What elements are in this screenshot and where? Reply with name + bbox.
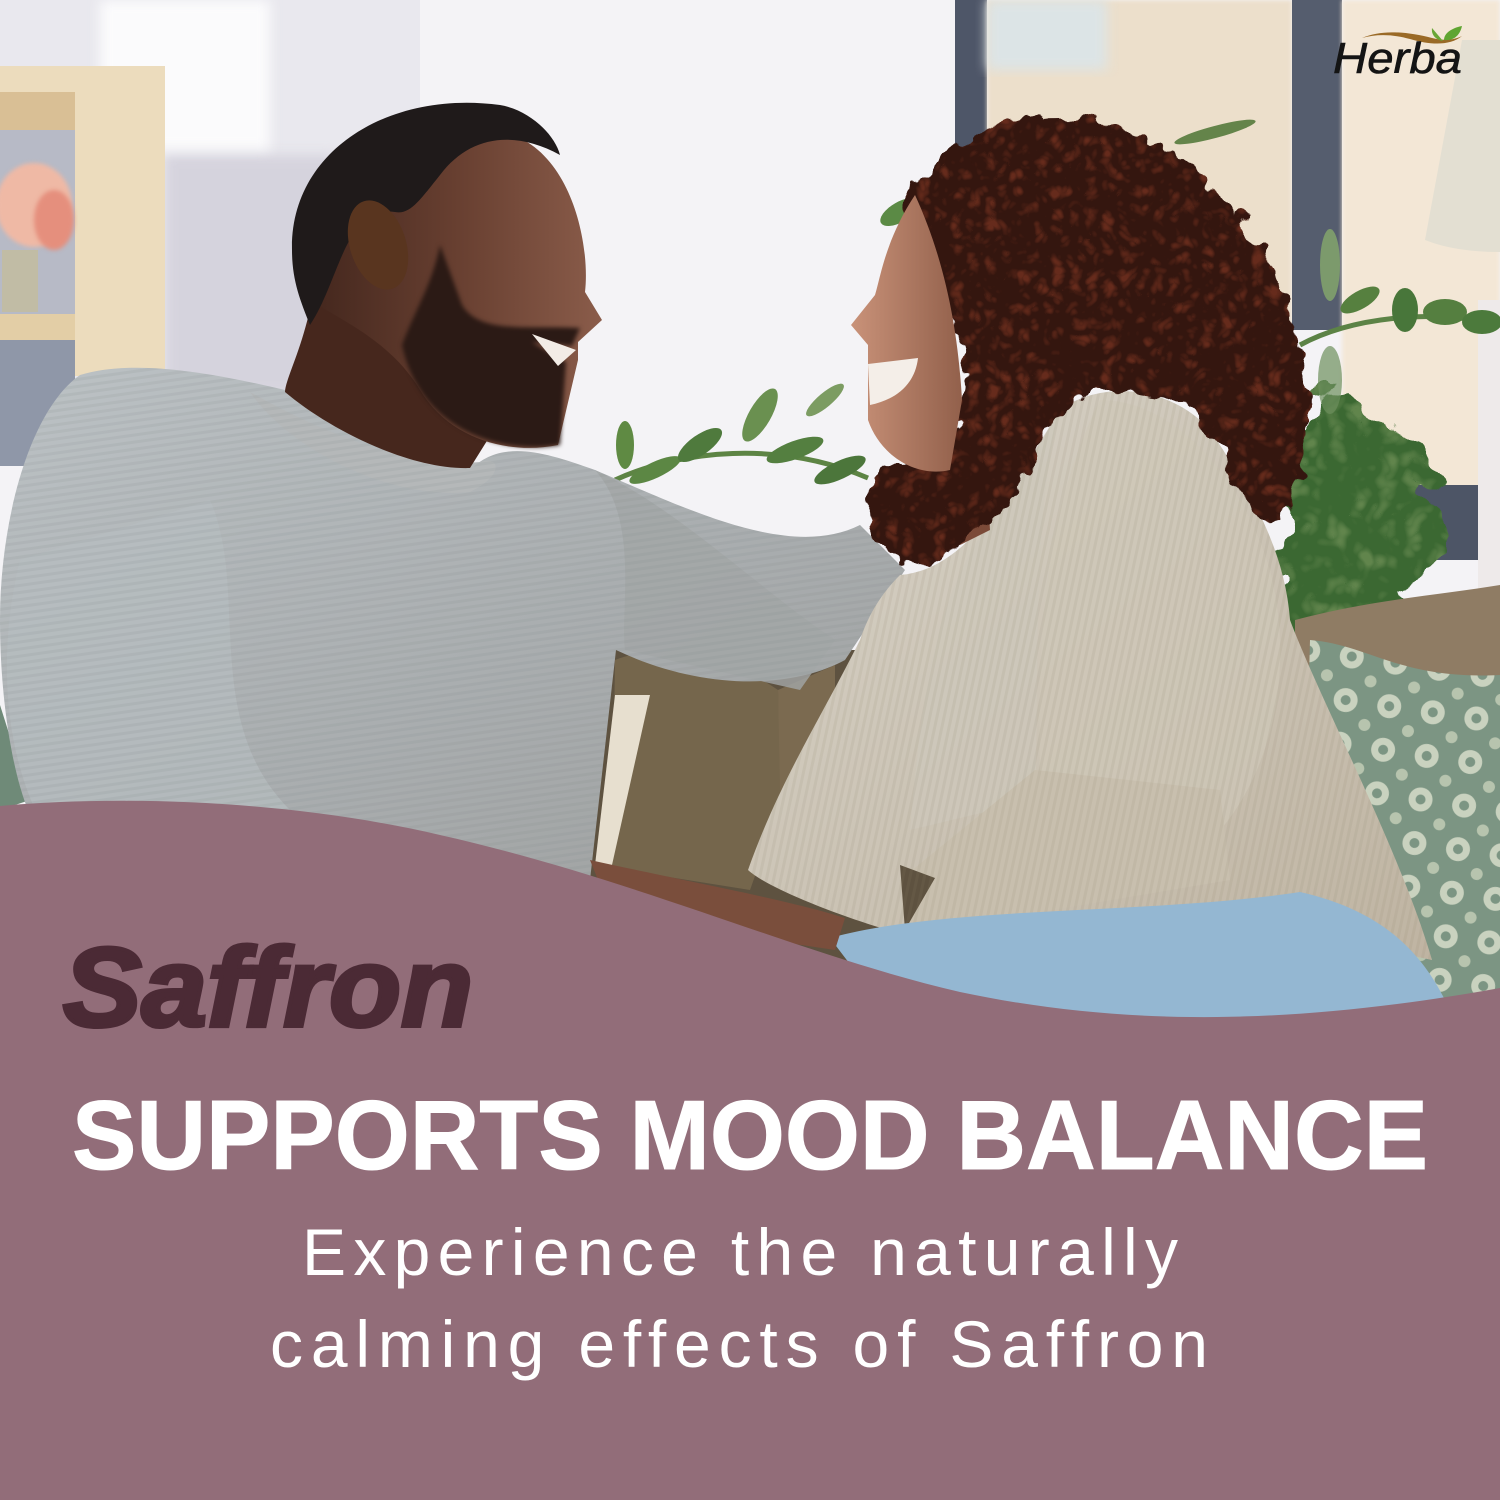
photo: woman's face xyxy=(851,195,962,472)
purple wave panel xyxy=(0,801,1500,1500)
photo: woman's jeans xyxy=(830,892,1445,1050)
photo: plants xyxy=(615,115,1500,640)
photo: man's neck and head xyxy=(285,103,602,468)
subtext line 2: calming effects of Saffron xyxy=(270,1307,1208,1381)
subtext line 1: Experience the naturally xyxy=(302,1215,1178,1289)
photo: bookshelf with flowers xyxy=(0,66,165,466)
photo: man's hand on sofa xyxy=(590,860,845,950)
photo: sofa xyxy=(0,585,1500,1010)
heading: Saffron: Saffron xyxy=(63,925,473,1050)
photo: lamp shade xyxy=(1425,40,1500,252)
photo: room background xyxy=(0,0,1500,1000)
photo: woman's smile xyxy=(868,358,918,405)
logo: Herba: Herba xyxy=(1333,34,1462,83)
headline: Supports Mood Balance: SUPPORTS MOOD BALANCE xyxy=(72,1080,1428,1190)
photo: woman's neck xyxy=(940,440,990,545)
photo: woman's curly hair xyxy=(865,117,1308,563)
photo: woman's knit sweater xyxy=(748,391,1432,960)
photo: man's sweater xyxy=(0,368,905,880)
